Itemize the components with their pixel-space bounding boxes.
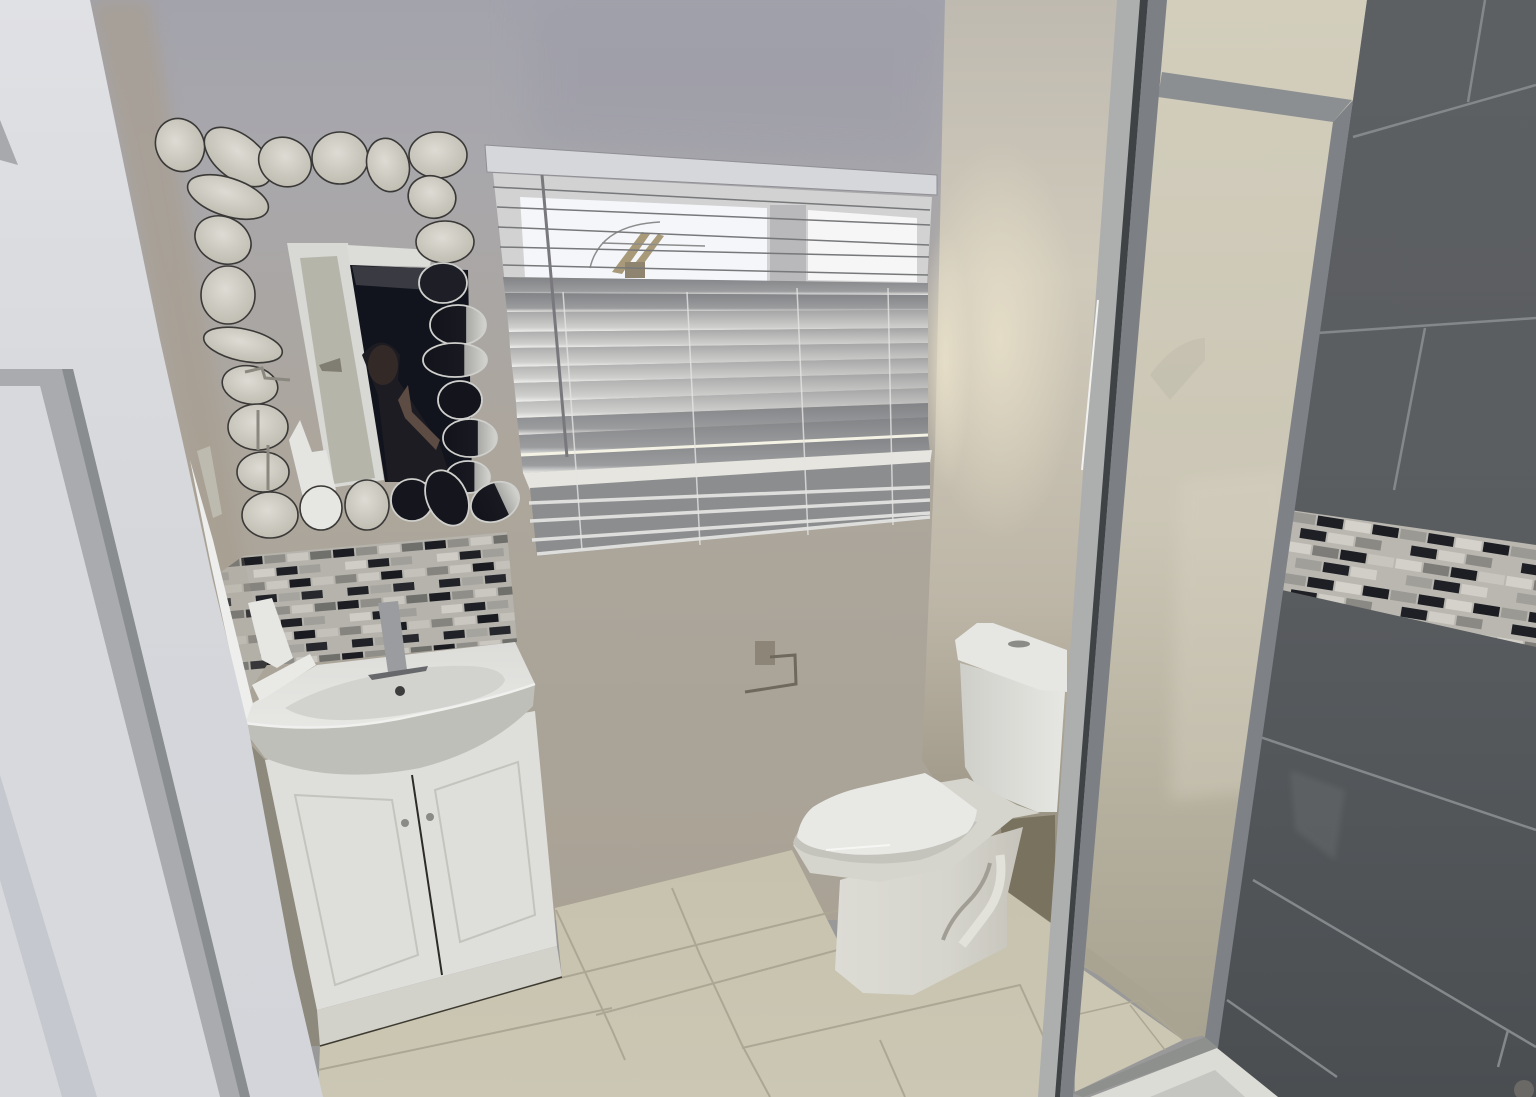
floor [318, 850, 1055, 1097]
standing rolled towel [248, 598, 293, 668]
trapway curve [943, 863, 990, 940]
door upper panel corner [0, 120, 18, 165]
vanity cabinet [250, 711, 562, 1046]
back wall [80, 0, 960, 920]
right side wall [919, 0, 1125, 930]
reflected door frame [287, 243, 384, 488]
shower door dark channel [1055, 0, 1148, 1097]
shower door silver frame [1038, 0, 1140, 1097]
bowl rim [793, 778, 1040, 882]
door [0, 0, 323, 1097]
reflected door handle [319, 358, 342, 372]
shower frame top [1158, 72, 1352, 122]
left door panel outline [295, 795, 418, 985]
faucet [378, 601, 407, 672]
frame highlight [1082, 300, 1098, 470]
tank lid [955, 623, 1067, 692]
valance [485, 145, 937, 195]
light switch plate [197, 446, 222, 518]
shower mosaic band [1282, 510, 1536, 647]
sink basin [285, 666, 505, 720]
sink front lip [245, 684, 535, 775]
window glass right [808, 210, 917, 282]
utility pole outside [590, 222, 705, 278]
cabinet base [317, 946, 562, 1046]
shower baseboard [1085, 947, 1205, 1040]
mosaic backsplash [217, 532, 517, 690]
towel ring reflection on glass [1150, 338, 1205, 400]
bowl body [835, 827, 1023, 995]
reflected person [362, 342, 452, 482]
cabinet door seam [412, 775, 442, 975]
window glass left [520, 197, 767, 282]
shower wall behind glass [1072, 0, 1367, 1092]
door knobs [401, 819, 409, 827]
tank body [960, 663, 1065, 812]
toilet paper holder [745, 641, 796, 692]
reflected door lintel [347, 245, 432, 267]
reflected door panel [300, 256, 375, 484]
rim highlight [245, 684, 535, 728]
upper blind slats [503, 277, 930, 473]
shower door gray rail [1060, 0, 1167, 1097]
door handle [1514, 1080, 1534, 1097]
centre mullion [770, 205, 806, 282]
mirror stones [147, 110, 474, 538]
blind cord [542, 175, 567, 457]
window [485, 145, 937, 556]
shower tray [1090, 1048, 1278, 1097]
blind cords over glass [493, 187, 930, 275]
shower sill [1072, 1037, 1218, 1097]
floor seen through glass [1072, 962, 1183, 1092]
lower blind stack [523, 450, 932, 556]
door panel moulding [0, 369, 250, 1097]
reflected stones [391, 263, 526, 533]
right door panel outline [435, 762, 535, 942]
hanging towel [190, 460, 255, 722]
toilet [793, 623, 1067, 995]
towel ring reflection [245, 368, 290, 490]
shower wall tiles [1217, 0, 1536, 1097]
lid [797, 773, 977, 855]
reflected towels [289, 420, 336, 502]
sink top surface [245, 642, 535, 728]
door lower panel moulding [0, 775, 97, 1097]
door panel [0, 386, 220, 1097]
blind ladder tapes [563, 288, 893, 550]
reflected dark room [350, 265, 472, 482]
window frame [493, 173, 932, 285]
lying rolled towel [252, 654, 316, 701]
seat [793, 795, 977, 864]
drain [395, 686, 405, 696]
wall shadow behind toilet [1000, 815, 1055, 925]
shower vertical frame [1205, 100, 1353, 1048]
reflection on tiles [1290, 770, 1345, 860]
backsplash side return [217, 556, 267, 690]
mirror [147, 110, 526, 538]
window light reflection on glass [1170, 470, 1290, 800]
sink [245, 601, 535, 775]
